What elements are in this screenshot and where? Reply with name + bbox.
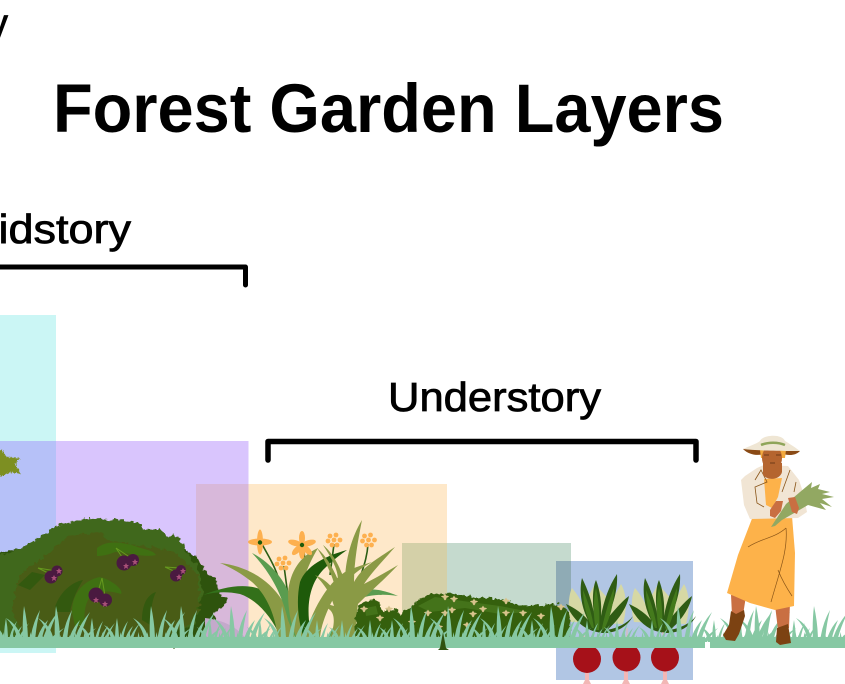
icon: farmer holding grass bundle: [723, 436, 834, 645]
skirt fold lines: [748, 528, 792, 602]
leaf: olive side blade: [304, 562, 372, 640]
boot right: [776, 624, 791, 645]
beet tails: [583, 665, 669, 684]
band: herbaceous layer: [196, 484, 447, 648]
agave plant left: [566, 574, 633, 633]
icon: berry shrub: [0, 518, 228, 646]
flower: clusters: [275, 533, 377, 570]
title: Forest Garden Layers: [53, 70, 724, 147]
band: root layer: [556, 561, 693, 680]
berry stems: [38, 548, 180, 596]
understory label: Understory: [388, 374, 602, 420]
dress top: [764, 478, 782, 508]
leaf: olive upright: [288, 548, 318, 640]
shrub shadow layer: [0, 530, 228, 646]
fine grass right: [710, 630, 845, 644]
leaf: olive arch: [220, 563, 298, 642]
midstory bracket: [0, 267, 246, 285]
icon: beets: [570, 628, 680, 684]
hat brim and crown: [743, 436, 800, 451]
band: shrub layer: [0, 441, 248, 648]
shrub inner foliage: [12, 533, 200, 642]
leaf: mid green: [252, 553, 296, 640]
band: ground cover and root overlap: [556, 561, 571, 648]
jacket: [741, 465, 807, 519]
band: canopy tree layer: [0, 315, 56, 653]
band: ground cover layer: [402, 543, 571, 648]
grass bundle: [771, 482, 834, 527]
agave plant right: [629, 574, 696, 633]
band: herbaceous and ground cover overlap: [402, 543, 447, 648]
band: shrub and herbaceous overlap: [196, 484, 248, 648]
facial features: [764, 455, 781, 463]
shrub highlight leaves: [72, 542, 156, 626]
legs: [731, 595, 790, 630]
soft mound shadow: [205, 618, 250, 648]
hands: [770, 497, 799, 518]
beet stems above ground: [584, 628, 663, 648]
shrub dark folds: [18, 572, 156, 626]
icon: flowering herbs: [203, 520, 398, 648]
leaf: green lower right: [325, 589, 398, 640]
understory bracket: [268, 442, 696, 460]
grass band right: [710, 637, 845, 648]
icon: agave plants: [566, 574, 696, 633]
flower stems: [262, 544, 368, 596]
hat underside: [743, 446, 800, 455]
ground grass: [0, 606, 845, 648]
icon: ground cover bushes: [355, 593, 570, 642]
ground-level stalk: [438, 632, 449, 650]
band: canopy and shrub overlap: [0, 441, 56, 648]
fine grass left: [0, 630, 705, 644]
shrub foliage: [0, 518, 203, 640]
berry calyxes: [51, 559, 186, 607]
icon: tree leaf fragment: [0, 449, 21, 476]
clump: olive spiked leaves: [315, 520, 398, 640]
hat band: [761, 443, 785, 445]
hair: [760, 450, 786, 458]
leaf: deep green sweep: [298, 550, 347, 638]
jacket collar lines: [755, 470, 796, 507]
flower: four petal: [248, 530, 272, 554]
flower centres: [258, 540, 304, 547]
grass band: [0, 637, 705, 648]
root layer soil mask strip: [570, 640, 680, 648]
flower: daisy: [287, 531, 317, 559]
boot left: [723, 610, 745, 641]
layer bands: [0, 315, 693, 680]
face: [762, 446, 782, 470]
skirt: [727, 516, 795, 610]
ground cover lighter foliage: [365, 597, 530, 616]
leaf: dark green arch: [203, 586, 292, 640]
berries: [44, 554, 186, 606]
ground cover blossoms: [360, 594, 565, 630]
neck: [763, 463, 782, 479]
ground cover dark foliage: [355, 593, 570, 642]
beet roots: [573, 644, 679, 673]
grass tufts: [0, 606, 845, 642]
